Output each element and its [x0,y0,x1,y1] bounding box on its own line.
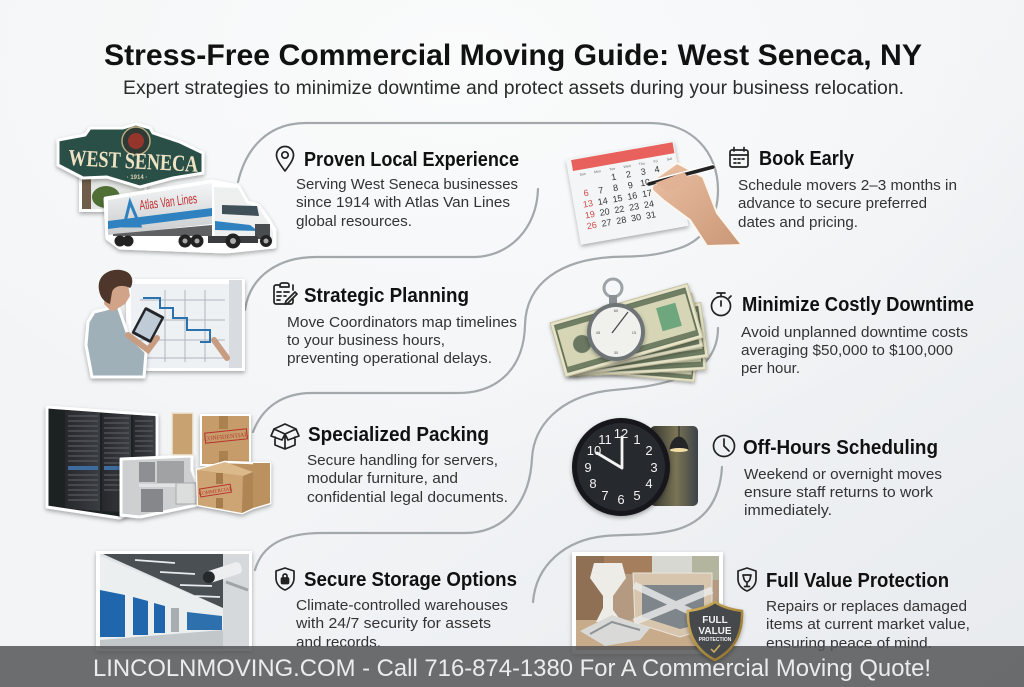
illustration: calendar and hand with pen: 19 [584,209,596,220]
text block: strategic planning: Move Coordinators map timelines [287,315,517,331]
illustration: wall clock and lamp: 9 [584,460,592,475]
illustration: server racks [47,407,157,518]
icon: location pin [276,146,294,171]
illustration: cash and stopwatch: 15 [632,330,637,335]
heading: strategic planning: Strategic Planning [304,285,469,307]
text block: book early: advance to secure preferred [738,196,927,212]
illustration: calendar and hand with pen: 17 [641,188,653,199]
illustration: calendar and hand with pen: 30 [630,212,642,224]
text block: book early: Schedule movers 2–3 months in [738,178,957,194]
illustration: cardboard boxes [172,413,270,513]
text block: off-hours scheduling: Weekend or overnight moves [744,467,942,483]
heading: proven local experience: Proven Local Experience [304,149,519,171]
panel: off-hours scheduling [572,418,942,519]
text block: secure storage options: with 24/7 security for assets [295,616,491,632]
illustration: calendar and hand with pen: 1 [610,172,617,182]
text block: proven local experience [296,177,518,230]
heading: specialized packing: Specialized Packing [308,424,489,446]
illustration: storage warehouse with camera [96,551,252,651]
text block: full value protection: items at current market value, [766,617,970,633]
illustration: calendar and hand with pen: Wed [623,164,631,169]
connector curves [238,123,722,602]
panel: proven local experience [58,124,519,251]
illustration: calendar and hand with pen: 14 [597,195,609,207]
badge: full value protection shield: VALUE [698,626,732,637]
illustration: cash and stopwatch: 30 [614,350,619,355]
text block: specialized packing: modular furniture, and [307,471,458,487]
illustration: calendar and hand with pen: Thu [639,161,645,166]
illustration: calendar and hand with pen: Fri [653,159,658,164]
text block: strategic planning: to your business hours, [287,333,445,349]
text block: secure storage options: Climate-controlled warehouses [296,598,508,614]
illustration: calendar and hand with pen: 26 [586,220,598,231]
illustration: moving truck: Atlas Van Lines [138,190,198,213]
illustration: wall clock and lamp: 4 [645,476,653,491]
text block: full value protection: Repairs or replaces damaged [766,599,967,615]
text block: book early [738,178,957,231]
text block: proven local experience: since 1914 with Atlas Van Lines [296,195,510,211]
illustration: calendar and hand with pen: 22 [614,204,625,215]
heading: secure storage options: Secure Storage Options [304,569,517,591]
illustration: calendar and hand with pen: Tue [609,167,616,172]
text block: off-hours scheduling: ensure staff returns to work [744,485,934,501]
illustration: calendar and hand with pen: 7 [597,185,604,196]
illustration: shrink-wrapped items [572,552,723,654]
illustration: calendar and hand with pen: 31 [645,209,657,221]
badge: full value protection shield [688,602,742,660]
illustration: cardboard boxes: CONFIDENTIAL [204,432,249,443]
bottom contact bar: LINCOLNMOVING.COM - Call 716-874-1380 For A Commercial Moving Quote! [93,655,931,682]
text block: full value protection: ensuring peace of mind. [766,636,932,652]
text block: secure storage options [295,598,508,651]
heading: off-hours scheduling: Off-Hours Scheduling [743,437,938,459]
illustration: calendar and hand with pen [566,141,742,246]
heading: minimize costly downtime: Minimize Costly Downtime [742,294,974,316]
panel: specialized packing [47,407,508,518]
illustration: calendar and hand with pen: 27 [601,217,612,229]
illustration: calendar and hand with pen: 2 [625,169,632,180]
illustration: moving truck [106,182,274,251]
heading: full value protection: Full Value Protection [766,570,949,592]
text block: off-hours scheduling: immediately. [744,503,832,519]
illustration: calendar and hand with pen: 3 [640,166,647,177]
illustration: calendar and hand with pen: 23 [628,201,640,213]
text block: full value protection [766,599,970,652]
illustration: coordinator with blueprint and tablet [86,270,245,377]
text block: minimize costly downtime: per hour. [741,361,800,377]
text block: specialized packing: Secure handling for servers, [307,453,498,469]
text block: strategic planning: preventing operational delays. [287,351,492,367]
panel: full value protection [572,552,970,654]
icon: package box [271,424,299,449]
illustration: West Seneca sign [58,124,203,212]
illustration: calendar and hand with pen: Mon [594,169,601,174]
illustration: wall clock and lamp [572,418,698,516]
illustration: calendar and hand with pen: Sun [579,172,586,177]
icon: clipboard [274,283,297,304]
text block: specialized packing [307,453,508,506]
illustration: calendar and hand with pen: 13 [582,198,594,210]
illustration: wall clock and lamp: 2 [645,443,653,458]
icon: stopwatch [712,293,731,316]
illustration: wall clock and lamp: 5 [633,488,641,503]
heading: book early: Book Early [759,148,855,170]
bottom contact bar [0,646,1024,687]
text block: minimize costly downtime: averaging $50,000 to $100,000 [741,343,953,359]
text block: proven local experience: Serving West Seneca businesses [296,177,518,193]
illustration: calendar and hand with pen: 24 [643,198,655,210]
panel: minimize costly downtime [550,279,974,382]
illustration: calendar and hand with pen: 16 [626,190,638,202]
text block: minimize costly downtime [741,325,968,377]
text block: proven local experience: global resources. [296,214,412,230]
icon: security shield with lock [276,568,294,590]
illustration: calendar and hand with pen: 8 [612,182,619,193]
text block: specialized packing: confidential legal documents. [307,490,508,506]
illustration: calendar and hand with pen: 6 [583,188,589,198]
illustration: cash and stopwatch: 60 [614,308,619,313]
text block: secure storage options: and records. [296,635,381,651]
illustration: West Seneca sign: WEST SENECA [68,145,199,177]
illustration: wall clock and lamp: 6 [617,492,625,507]
illustration: cardboard boxes: COMMERCIAL [199,487,233,497]
illustration: wall clock and lamp: 7 [601,488,609,503]
illustration: wall clock and lamp: 12 [614,426,628,441]
illustration: cash and stopwatch [550,279,708,382]
illustration: wall clock and lamp: 11 [598,432,612,447]
text block: strategic planning [287,315,517,367]
title: Stress-Free Commercial Moving Guide: West Seneca, NY [104,39,922,72]
illustration: calendar and hand with pen: Sat [666,157,672,161]
illustration: wall clock and lamp: 1 [633,432,641,447]
illustration: wall clock and lamp: 8 [589,476,597,491]
illustration: calendar and hand with pen: 4 [654,164,660,175]
illustration: wall clock and lamp: 3 [650,460,658,475]
icon: calendar [730,148,748,167]
illustration: calendar and hand with pen: 20 [599,206,610,218]
badge: full value protection shield: FULL [702,615,728,626]
illustration: wall clock and lamp: 10 [587,443,601,458]
illustration: cash and stopwatch: 45 [596,330,601,335]
text block: off-hours scheduling [744,467,942,519]
illustration: West Seneca sign: · 1914 · [127,175,147,181]
illustration: calendar and hand with pen: 28 [616,215,627,226]
illustration: modular furniture [121,456,197,517]
illustration: calendar and hand with pen: 10 [639,177,651,188]
text block: minimize costly downtime: Avoid unplanned downtime costs [741,325,968,341]
panel: book early [566,141,957,246]
badge: full value protection shield: PROTECTION [699,637,732,643]
icon: clock [714,436,734,456]
text block: book early: dates and pricing. [738,215,858,231]
icon: shield with fragile glass [738,568,756,591]
illustration: calendar and hand with pen: 15 [612,193,623,204]
illustration: calendar and hand with pen: 9 [627,180,634,191]
panel: strategic planning [86,270,517,377]
subtitle: Expert strategies to minimize downtime and protect assets during your business relocation. [123,78,904,99]
panel: secure storage options [96,551,517,651]
